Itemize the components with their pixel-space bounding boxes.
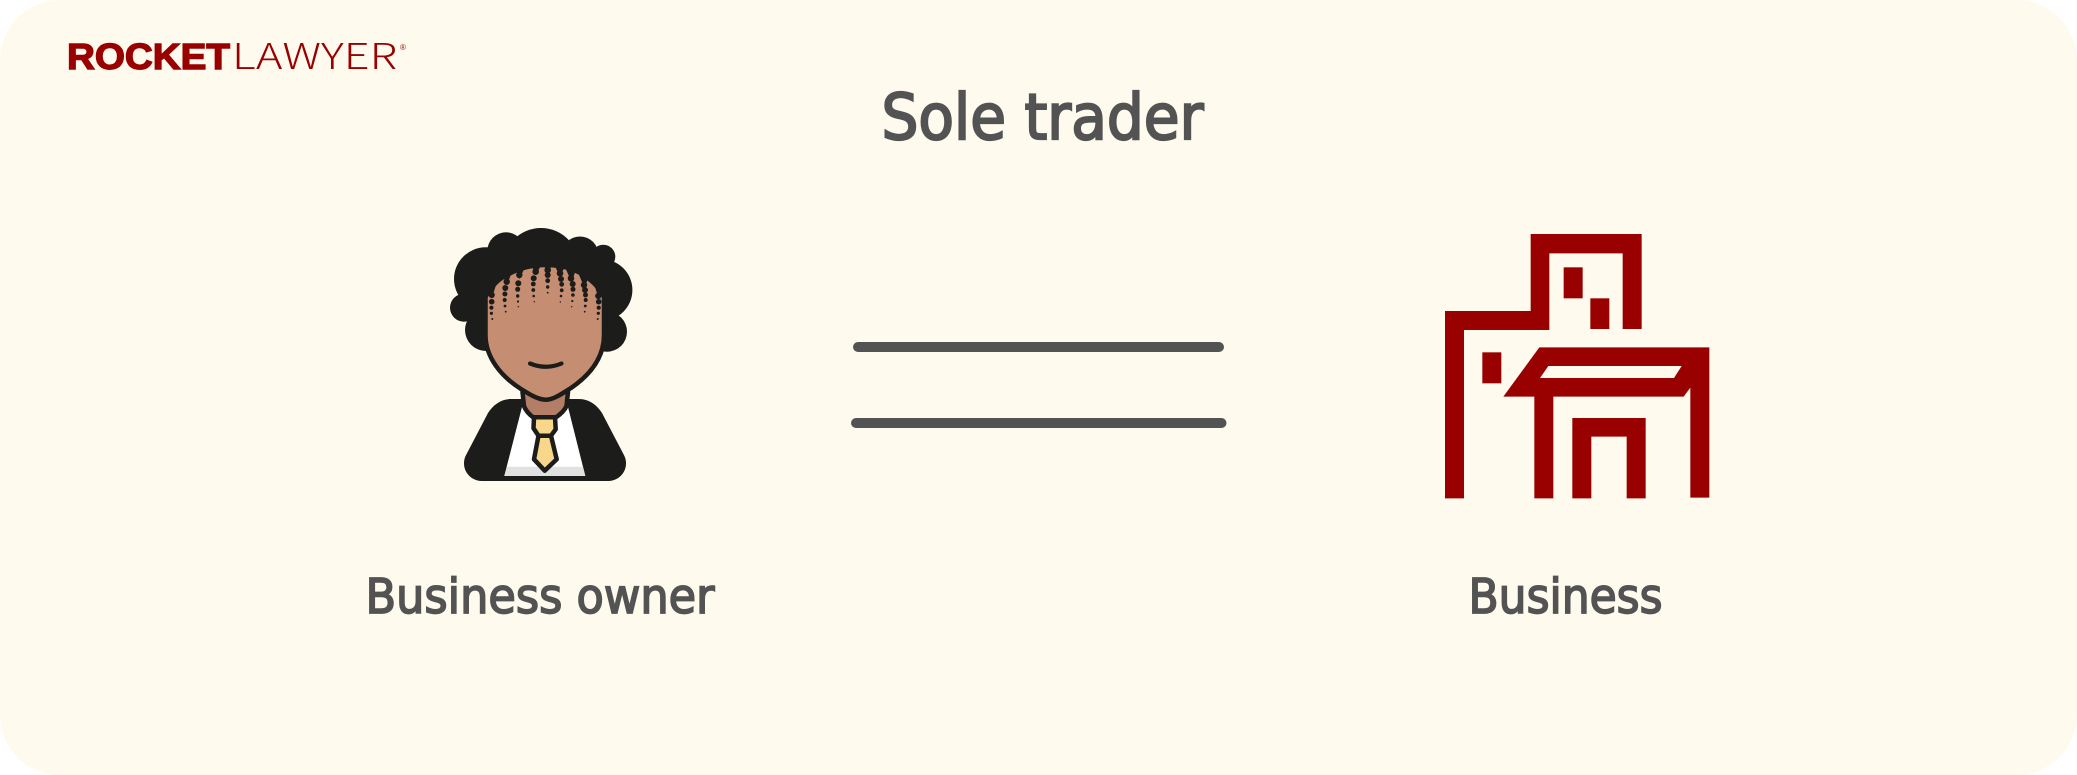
door (1572, 418, 1646, 498)
shop awning and walls (1503, 347, 1709, 498)
face (486, 265, 604, 400)
shirt shadow (504, 467, 585, 476)
neck (522, 392, 568, 418)
lower window (1590, 298, 1609, 329)
mouth (530, 364, 562, 367)
jacket (464, 399, 626, 481)
label: business owner: Business owner (366, 569, 715, 625)
logo: Rocket Lawyer: LAWYER (232, 28, 397, 80)
hair (450, 228, 632, 352)
fringe braids (488, 263, 603, 320)
label: business: Business (1468, 569, 1662, 625)
icon: business building (1445, 234, 1709, 498)
logo: Rocket Lawyer: ROCKET (67, 36, 230, 77)
icon: business owner (450, 228, 632, 481)
shirt (504, 405, 585, 476)
logo: Rocket Lawyer: ® (400, 43, 406, 52)
logo: Rocket Lawyer (67, 28, 406, 80)
equals sign: top bar (853, 342, 1224, 352)
equals sign: bottom bar (851, 418, 1226, 428)
side window (1482, 352, 1501, 383)
building outline (1445, 234, 1642, 498)
title: Sole trader (882, 81, 1204, 154)
upper window (1564, 267, 1583, 298)
tie (534, 417, 557, 471)
